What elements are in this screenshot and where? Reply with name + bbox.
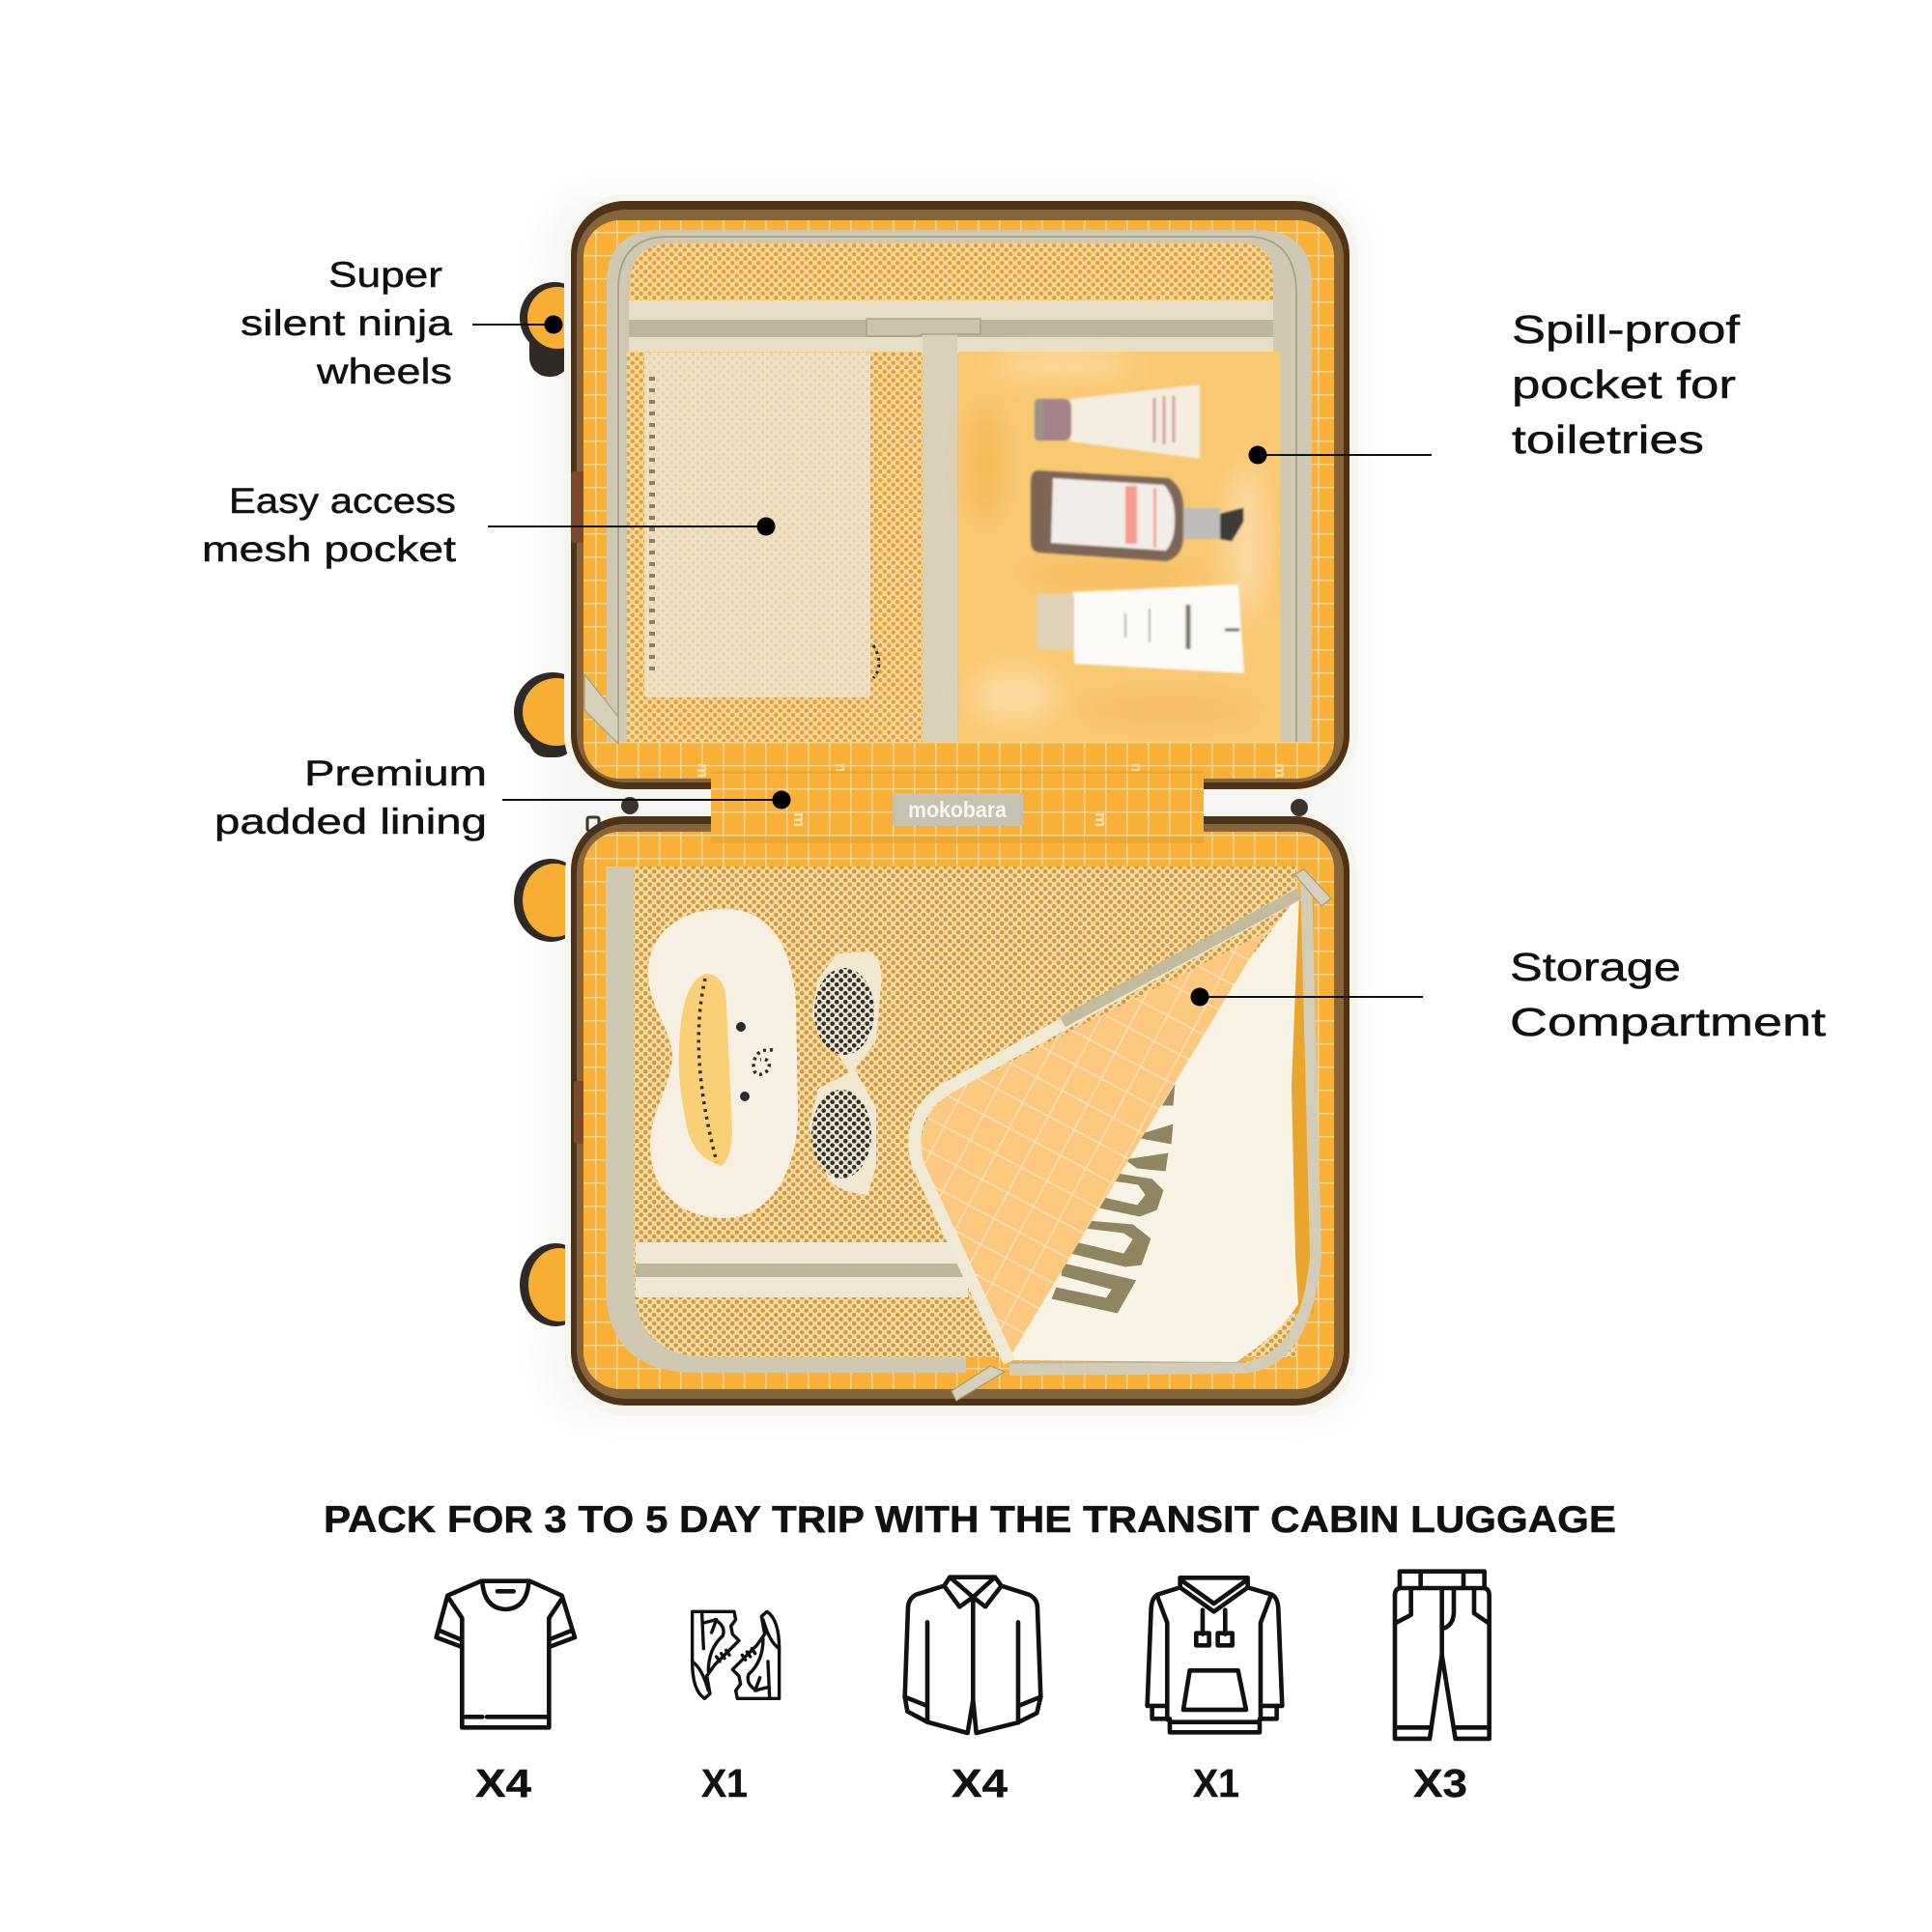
brand name: mokobara xyxy=(908,797,1007,822)
logos xyxy=(648,242,1290,778)
logos: m xyxy=(694,763,712,778)
icon: hoodie xyxy=(1148,1577,1282,1732)
shell rim xyxy=(564,194,1358,796)
callout: toiletries pocket xyxy=(1248,307,1741,464)
label text: padded lining xyxy=(214,802,487,841)
soft shadow xyxy=(541,191,1362,1420)
pointer xyxy=(472,324,553,326)
lining xyxy=(583,220,1334,779)
logos: m xyxy=(1127,763,1146,778)
label text: Spill-proof xyxy=(1512,307,1741,352)
quantity labels: X4 xyxy=(475,1761,531,1805)
icon: trousers xyxy=(1395,1572,1490,1739)
label text xyxy=(241,255,453,391)
icon: t-shirt xyxy=(437,1581,575,1727)
lining gap xyxy=(1291,898,1314,1314)
center divider xyxy=(923,334,957,742)
pointer xyxy=(502,799,780,801)
lining xyxy=(583,832,1334,1389)
left shoe xyxy=(693,1611,739,1698)
mesh compartment xyxy=(634,867,1296,1357)
label text xyxy=(202,481,457,569)
side zip frame xyxy=(1009,874,1316,1370)
callout: mesh pocket xyxy=(202,481,775,569)
heading: PACK FOR 3 TO 5 DAY TRIP WITH THE TRANSIT CABIN LUGGAGE xyxy=(324,1499,1616,1541)
corner zip pull xyxy=(584,674,618,744)
icon: shirt xyxy=(905,1577,1040,1733)
notebook xyxy=(644,353,870,697)
panel: bottom shell xyxy=(565,810,1357,1416)
zip pulls xyxy=(952,869,1331,1401)
label text: Premium xyxy=(304,753,487,793)
label text: silent ninja xyxy=(241,303,453,343)
pointer xyxy=(1200,996,1423,998)
logos: m xyxy=(832,763,850,778)
packing section xyxy=(324,1499,1616,1805)
quantity labels: X4 xyxy=(952,1761,1008,1805)
tube one xyxy=(1035,384,1200,459)
callout: wheels xyxy=(241,255,562,391)
label text: mesh pocket xyxy=(202,529,457,569)
label text xyxy=(1510,945,1827,1044)
quantity labels xyxy=(475,1761,1467,1805)
label text: Easy access xyxy=(229,481,456,521)
logos: m xyxy=(1271,763,1290,778)
icon: wheels xyxy=(514,282,591,1326)
zipper band xyxy=(629,300,1273,354)
right shoe xyxy=(732,1611,780,1698)
folded flap xyxy=(915,894,1299,1362)
padded strap xyxy=(711,771,1204,843)
top mesh xyxy=(630,243,1273,303)
zip pull xyxy=(867,319,980,336)
shell rim xyxy=(565,810,1357,1416)
eye mask xyxy=(648,909,798,1218)
zipper band xyxy=(636,1242,968,1297)
tube three xyxy=(1037,584,1244,673)
logos: m xyxy=(648,242,667,256)
label text: Compartment xyxy=(1510,1000,1827,1044)
shirt print xyxy=(1051,1082,1176,1314)
callout: storage compartment xyxy=(1190,945,1827,1044)
hinge patch xyxy=(574,1081,588,1144)
quantity labels: X3 xyxy=(1413,1761,1467,1805)
bottle xyxy=(1031,470,1243,561)
label text xyxy=(1512,307,1741,462)
hinge patch xyxy=(571,471,586,543)
label text: Super xyxy=(328,255,442,295)
luggage xyxy=(514,191,1362,1420)
label text: toiletries xyxy=(1512,417,1704,462)
sunglasses xyxy=(809,952,882,1195)
hinges xyxy=(587,797,1308,831)
mokobara tag xyxy=(893,793,1023,826)
zip frame xyxy=(606,867,966,1373)
callout: padded lining xyxy=(214,753,790,841)
label text xyxy=(214,753,487,841)
strap logos: m xyxy=(790,812,809,827)
strap logos: m xyxy=(1092,812,1110,827)
label text: Storage xyxy=(1510,945,1681,989)
quantity labels: X1 xyxy=(1193,1761,1239,1805)
clear pocket xyxy=(958,352,1280,742)
panel: top shell xyxy=(564,194,1358,796)
mesh pocket xyxy=(627,352,923,742)
quantity labels: X1 xyxy=(701,1761,748,1805)
label text: pocket for xyxy=(1512,362,1736,407)
pointer xyxy=(1258,454,1432,456)
zip frame xyxy=(607,230,1312,742)
label text: wheels xyxy=(316,352,452,391)
strap logos xyxy=(790,812,1110,827)
pointer xyxy=(488,526,766,527)
icon: shoes xyxy=(693,1611,780,1698)
packed t-shirt xyxy=(1009,874,1316,1370)
